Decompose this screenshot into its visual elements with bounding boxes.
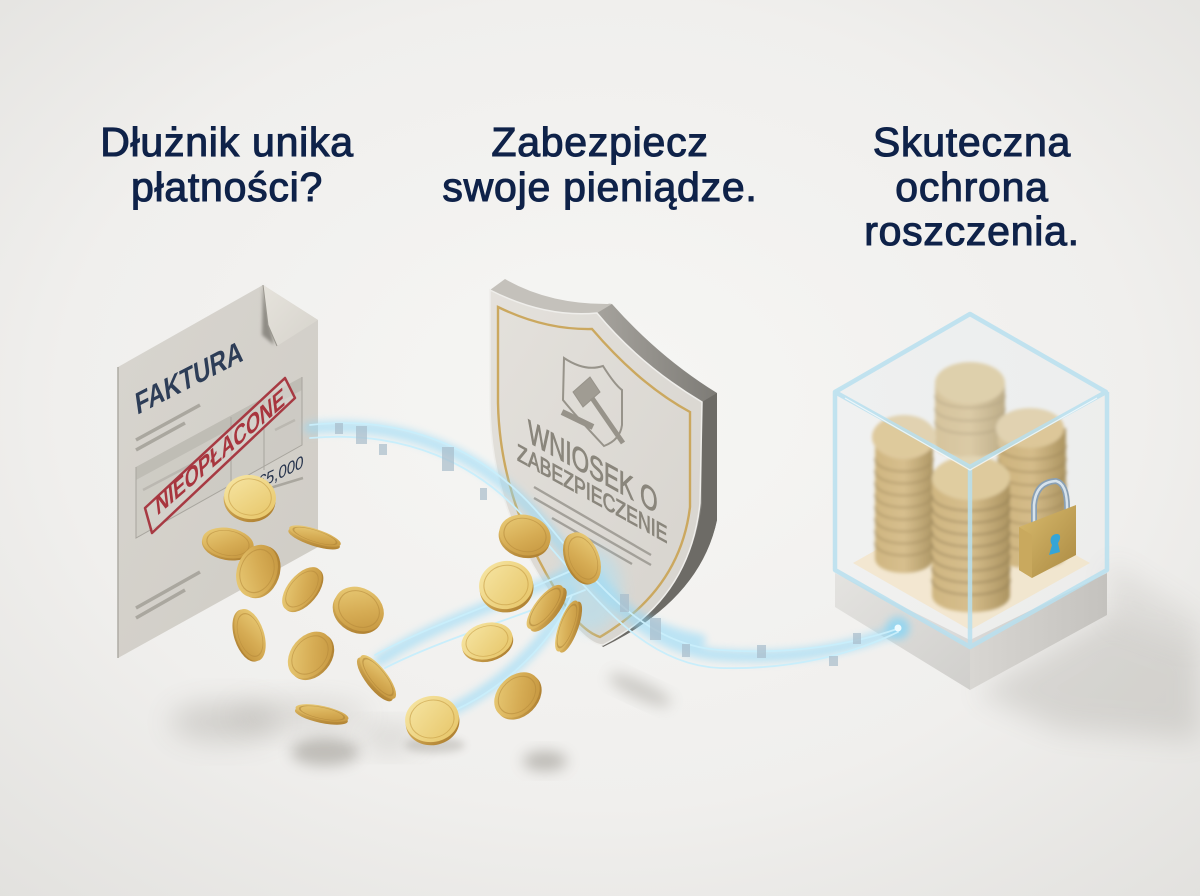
shield lines: [534, 487, 651, 565]
pedestal: [835, 573, 1107, 690]
stamp: unpaid: NIEOPŁACONE: [154, 381, 286, 522]
heading: column 3: Skuteczna: [873, 119, 1071, 165]
shield side: [585, 304, 717, 647]
invoice document: [118, 285, 318, 658]
cream platform: [853, 497, 1090, 630]
invoice amount: €5,000: [257, 452, 305, 493]
shield text: ZABEZPIECZENIE: [517, 439, 668, 549]
coin stacks: [872, 362, 1066, 612]
heading: column 1: Dłużnik unika: [100, 119, 354, 165]
glass walls: [835, 314, 1107, 647]
heading: column 2: swoje pieniądze.: [442, 164, 758, 210]
shield text: WNIOSEK O: [528, 412, 658, 521]
moving document icons: [335, 423, 861, 666]
page fold: [262, 285, 318, 346]
shield emblem: gavel: [562, 358, 623, 446]
shield: [490, 279, 717, 647]
heading: column 3: roszczenia.: [864, 208, 1080, 254]
shield top edge: [490, 279, 612, 314]
falling gold coins: [199, 472, 608, 750]
shield face: [490, 290, 702, 645]
heading: column 1: płatności?: [131, 164, 323, 210]
shield gold border: [498, 307, 690, 637]
floor shadows: [170, 560, 1200, 771]
invoice title: FAKTURA: [133, 335, 245, 422]
padlock: [1019, 481, 1076, 578]
invoice table: [136, 377, 302, 538]
data flow ribbon: [310, 423, 910, 718]
glass box: [835, 314, 1107, 690]
heading: column 3: ochrona: [895, 164, 1049, 210]
heading: column 2: Zabezpiecz: [491, 119, 709, 165]
invoice text lines: [136, 405, 303, 618]
